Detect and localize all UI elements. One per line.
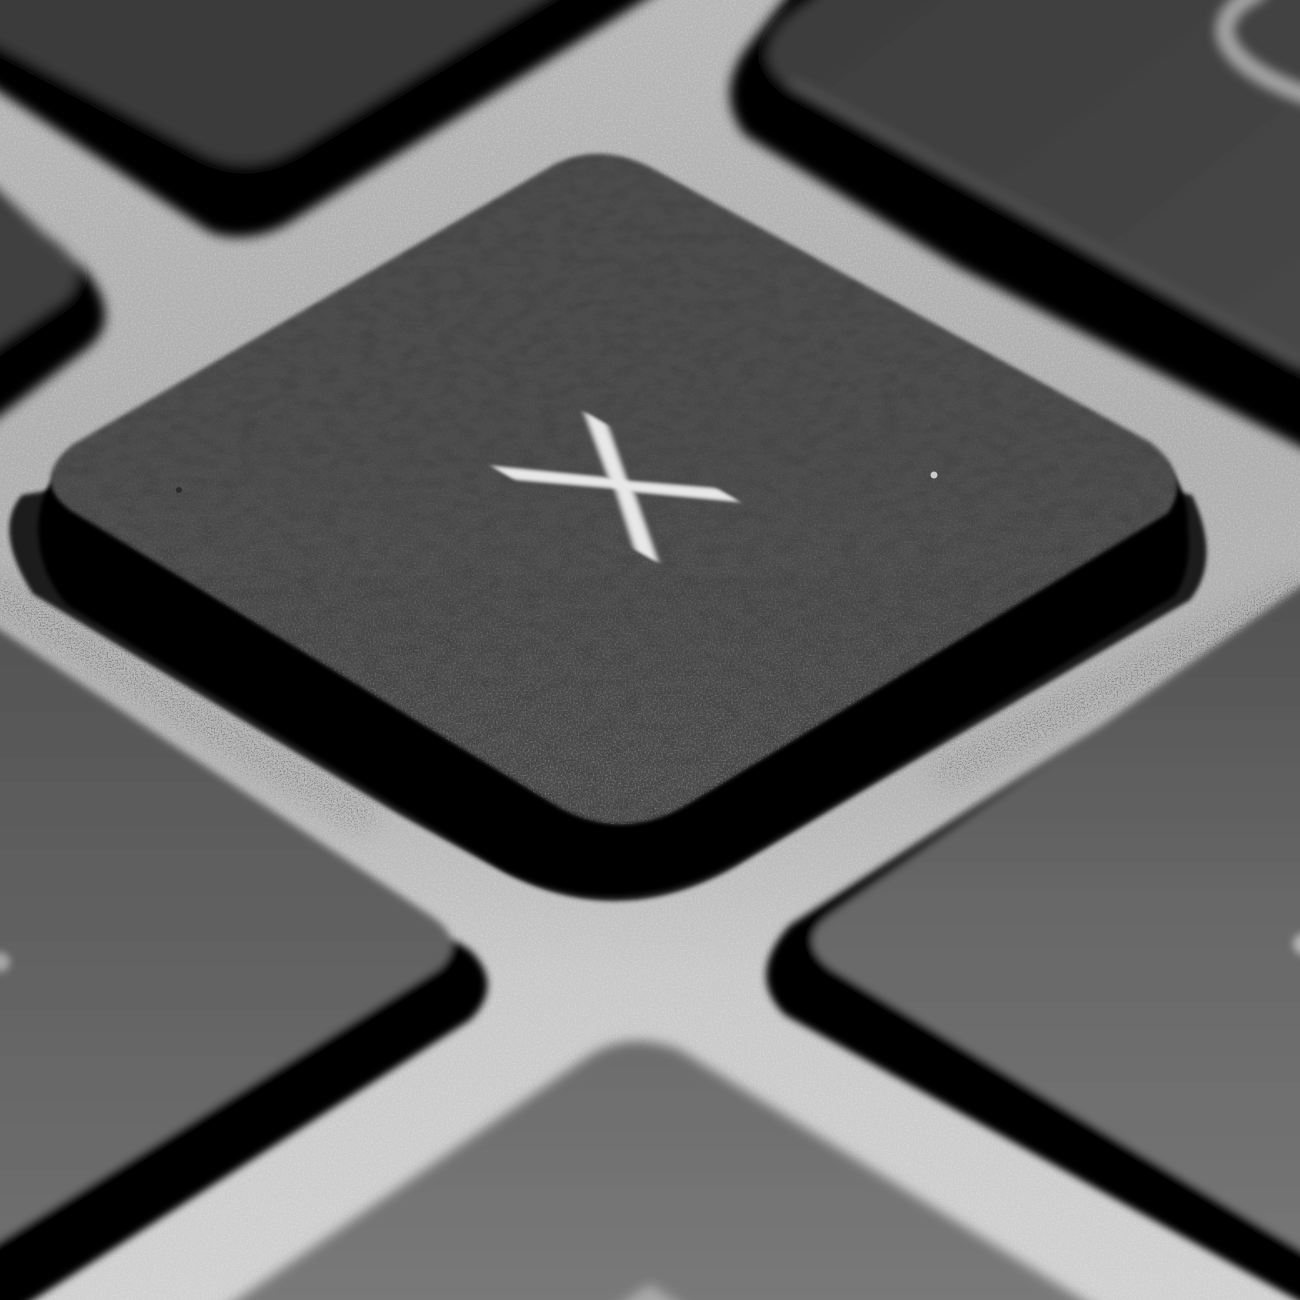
key: centre X xyxy=(0,130,1300,901)
key: bottom xyxy=(150,1041,1180,1300)
key: bottom right xyxy=(766,545,1300,1300)
key: left xyxy=(0,140,105,462)
key surface texture xyxy=(56,185,1176,824)
key legend mark: bottom left xyxy=(0,953,9,971)
key legend: X: X xyxy=(451,383,785,588)
key legend mark: bottom xyxy=(600,1285,700,1300)
key legend arc: top right xyxy=(1225,0,1300,100)
key edge highlight: top right xyxy=(790,82,1300,362)
key top face xyxy=(50,154,1177,824)
key side wall xyxy=(38,300,1189,896)
key recess shadow xyxy=(9,400,1207,901)
key: top left xyxy=(0,0,740,237)
dust pit xyxy=(176,487,182,493)
dust speck xyxy=(930,472,938,478)
key: bottom left xyxy=(0,590,488,1300)
speckled metal band xyxy=(0,564,1300,842)
key legend mark: bottom right xyxy=(1294,934,1300,954)
key: top right xyxy=(730,0,1300,478)
